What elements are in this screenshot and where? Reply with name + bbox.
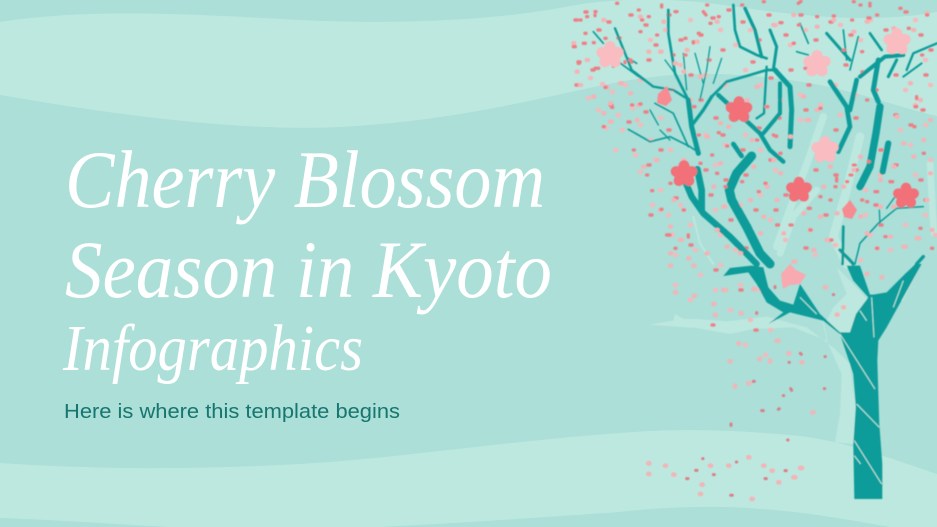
flower: pale top middle: [802, 50, 832, 79]
title: Season in Kyoto: [65, 224, 552, 315]
upper branches: [593, 5, 937, 264]
trunk highlight scratches: [800, 281, 903, 484]
falling petals, pale: [648, 266, 882, 499]
title: [62, 134, 552, 385]
pale background branches: [693, 117, 934, 264]
title: Cherry Blossom: [65, 134, 545, 225]
flower: pale top right: [882, 28, 912, 57]
top wave band: [0, 0, 937, 128]
pale ground branch and shadow trunk: [648, 314, 855, 444]
blossom petals, pale pink: [573, 13, 933, 262]
title: Infographics: [62, 312, 363, 385]
blossom petals, coral: [573, 1, 933, 248]
flower: coral lower: [785, 177, 813, 204]
flower: coral centre: [724, 96, 754, 124]
flower: coral right: [892, 183, 920, 210]
bud: lower large: [781, 264, 806, 289]
bud: right: [842, 200, 857, 219]
falling petals, coral: [687, 287, 834, 495]
subtitle: Here is where this template begins: [64, 401, 400, 423]
bottom left darker wave: [0, 518, 170, 527]
bud: upper: [657, 86, 672, 106]
flower: pale centre: [810, 136, 840, 165]
trunk: [723, 264, 922, 499]
flower: coral left: [669, 160, 699, 188]
bottom darker wave: [380, 507, 890, 527]
bottom wave band: [0, 430, 937, 527]
flower: pale top left: [595, 41, 625, 70]
extra coral blossom specks: [575, 10, 932, 330]
extra pale blossom haze: [588, 20, 936, 355]
cherry tree illustration: [573, 1, 937, 499]
